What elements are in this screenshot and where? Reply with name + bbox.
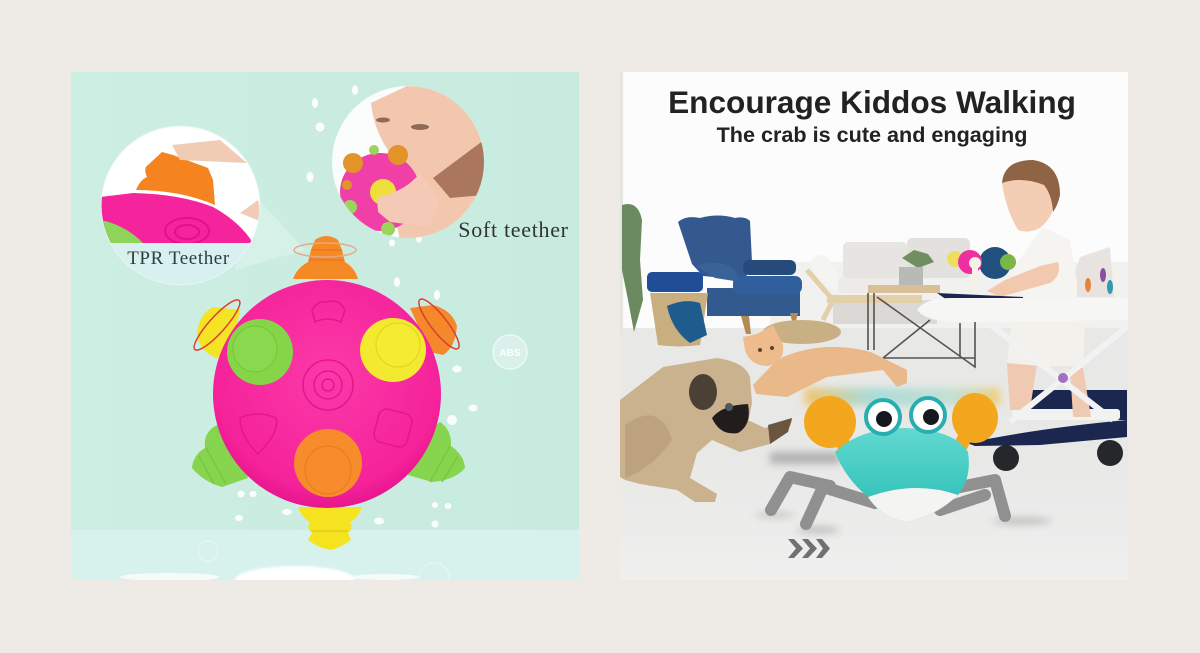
wall base band xyxy=(770,262,1128,328)
pink ball xyxy=(213,280,441,508)
sofa xyxy=(807,238,1011,324)
dog back shading xyxy=(625,415,672,478)
callout: soft teether xyxy=(332,86,569,242)
crab body xyxy=(835,428,969,522)
circle photo background xyxy=(332,86,484,238)
arm xyxy=(987,262,1059,297)
coffee table xyxy=(868,285,975,367)
dog ear xyxy=(689,374,717,410)
room floor xyxy=(623,328,1128,332)
callout beam xyxy=(236,202,304,270)
lower right green knob xyxy=(408,422,465,482)
baby walker base xyxy=(967,390,1127,471)
baby biting ball xyxy=(340,86,490,240)
infographic canvas xyxy=(71,72,1128,580)
cat head xyxy=(743,325,783,366)
pug dog xyxy=(620,358,792,502)
green knob on ball xyxy=(227,319,293,385)
base upper xyxy=(1020,390,1127,420)
right orange claw xyxy=(952,393,998,443)
label: TPR Teether xyxy=(127,248,230,269)
orange cat xyxy=(743,325,907,397)
scattered white beads xyxy=(235,85,478,528)
crab shadows xyxy=(755,452,1052,533)
potted plant on table xyxy=(899,250,934,287)
crab legs xyxy=(771,477,1005,524)
seat pattern xyxy=(1085,268,1113,294)
base lower xyxy=(967,420,1127,446)
bottom yellow knob xyxy=(298,507,362,550)
colorful seat xyxy=(1067,247,1114,297)
ABS bubble xyxy=(493,335,527,369)
white deck xyxy=(1012,409,1120,420)
heading: Encourage Kiddos Walking xyxy=(668,84,1076,120)
cat eyes xyxy=(758,346,774,352)
panel: crab toy xyxy=(620,72,1128,580)
shirt xyxy=(1010,227,1077,300)
room wall xyxy=(620,72,1128,332)
panel: teether ball xyxy=(71,72,579,594)
right orange side knob xyxy=(410,298,460,355)
orange knob on ball xyxy=(294,429,362,497)
dog eye xyxy=(725,403,733,411)
dog paw xyxy=(768,418,792,444)
blue armchair xyxy=(678,216,802,334)
wall edge xyxy=(620,72,623,337)
left orange claw xyxy=(804,396,856,448)
crab eyes xyxy=(866,398,945,434)
closeup of knob xyxy=(100,125,262,288)
shorts xyxy=(1007,318,1085,366)
panel background xyxy=(71,72,579,580)
walker tray xyxy=(917,250,1128,422)
left yellow side knob xyxy=(193,299,241,358)
round pouf xyxy=(763,320,841,344)
chair arms xyxy=(743,260,796,275)
label: Soft teether xyxy=(458,217,569,242)
baby xyxy=(987,160,1114,417)
top orange knob xyxy=(293,236,358,279)
console toys xyxy=(947,250,1016,293)
chair back xyxy=(678,216,752,280)
legs xyxy=(1007,363,1091,417)
crab arm stubs xyxy=(835,434,971,458)
lower left green knob xyxy=(192,425,248,487)
wheels xyxy=(993,440,1123,471)
hanging plant xyxy=(622,204,643,332)
pale floor band xyxy=(71,530,579,580)
yellow knob on ball xyxy=(360,318,426,382)
chair seat xyxy=(733,276,802,294)
chair legs xyxy=(741,313,798,334)
face xyxy=(1002,170,1057,232)
white belly xyxy=(868,488,958,522)
subheading: The crab is cute and engaging xyxy=(717,122,1027,147)
ABS bubble: ABS xyxy=(499,348,521,359)
direction arrows xyxy=(788,539,830,558)
walker frame xyxy=(987,322,1127,422)
ottoman basket with towel xyxy=(647,272,708,346)
dog muzzle xyxy=(712,404,749,433)
callout: TPR teether xyxy=(100,125,262,288)
motion glow xyxy=(805,388,1000,406)
hair xyxy=(1002,160,1060,212)
crab toy xyxy=(755,388,1052,533)
circle photo background xyxy=(100,126,260,286)
left armrest xyxy=(698,263,738,281)
tray top xyxy=(917,298,1128,322)
ABS bubbles on floor xyxy=(198,540,450,580)
chair body xyxy=(707,288,800,316)
toy console xyxy=(937,293,1023,303)
cat body xyxy=(753,347,907,397)
frame joint xyxy=(1058,373,1068,383)
dog body xyxy=(620,358,792,502)
embossed ball patterns xyxy=(240,301,414,454)
